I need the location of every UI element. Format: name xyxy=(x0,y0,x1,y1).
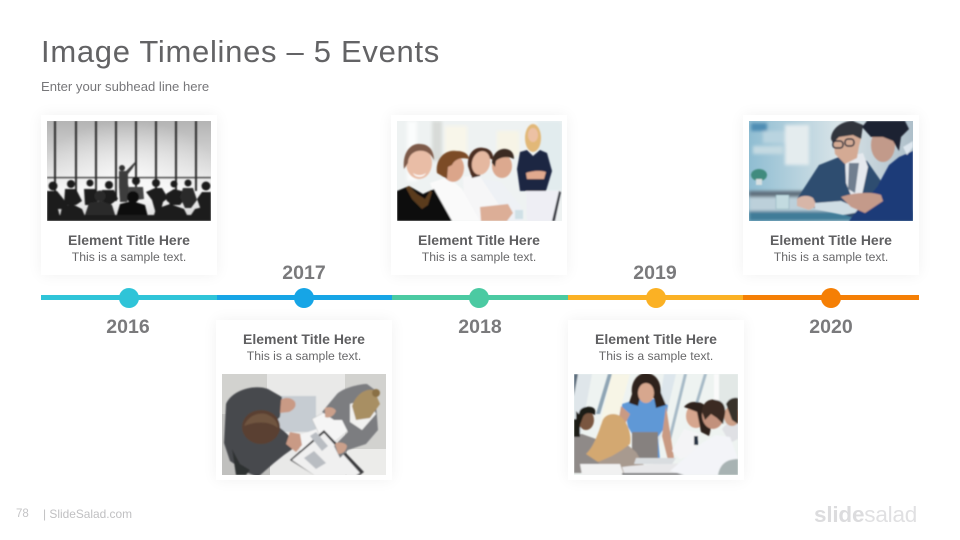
element title: Element Title Here xyxy=(68,232,190,248)
card: 2017 event xyxy=(216,320,392,480)
standing woman xyxy=(622,399,668,459)
marker: 2017 xyxy=(294,288,314,308)
presenter xyxy=(119,162,136,202)
standing woman xyxy=(525,124,541,152)
element title: Element Title Here xyxy=(595,331,717,347)
left man xyxy=(797,155,887,219)
element title: Element Title Here xyxy=(418,232,540,248)
photo: two businessmen reviewing a tablet xyxy=(749,121,913,221)
timeline segment: 2019 xyxy=(568,295,743,300)
left man xyxy=(574,434,602,473)
photo: two people at a desk from above xyxy=(222,374,386,475)
right group xyxy=(672,429,700,459)
year label: 2020: 2020 xyxy=(809,316,853,338)
photo: woman presenting to a meeting xyxy=(574,374,738,475)
photo: smiling team at a table xyxy=(397,121,562,221)
caption xyxy=(595,331,717,363)
card: 2020 event xyxy=(743,115,919,275)
marker: 2016 xyxy=(119,288,139,308)
year label: 2018: 2018 xyxy=(458,316,502,338)
timeline segment: 2017 xyxy=(217,295,392,300)
photo: silhouettes of an audience and presenter xyxy=(47,121,211,221)
caption xyxy=(770,232,892,264)
card: 2016 event xyxy=(41,115,217,275)
man 4 xyxy=(477,178,523,221)
front row xyxy=(67,194,77,204)
marker: 2020 xyxy=(821,288,841,308)
tablet xyxy=(815,201,865,215)
logo wordmark: slidesalad xyxy=(814,502,917,527)
sample text: This is a sample text. xyxy=(774,250,888,264)
woman 3 xyxy=(463,175,503,221)
year label: 2019: 2019 xyxy=(633,262,677,284)
timeline segment: 2020 xyxy=(743,295,919,300)
element title: Element Title Here xyxy=(770,232,892,248)
man 2 xyxy=(430,177,480,221)
sample text: This is a sample text. xyxy=(72,250,186,264)
subhead: Enter your subhead line here xyxy=(41,79,209,94)
marker: 2019 xyxy=(646,288,666,308)
footer source: | SlideSalad.com xyxy=(43,507,132,521)
laptop xyxy=(526,191,561,221)
marker: 2018 xyxy=(469,288,489,308)
right man xyxy=(849,151,913,221)
timeline segment: 2016 xyxy=(41,295,217,300)
timeline segment: 2018 xyxy=(392,295,568,300)
year label: 2016: 2016 xyxy=(106,316,150,338)
element title: Element Title Here xyxy=(243,331,365,347)
card: 2019 event xyxy=(568,320,744,480)
caption xyxy=(418,232,540,264)
timeline xyxy=(41,288,919,308)
title: Image Timelines – 5 Events xyxy=(41,34,440,69)
sample text: This is a sample text. xyxy=(247,349,361,363)
table xyxy=(622,464,732,473)
year label: 2017: 2017 xyxy=(282,262,326,284)
sample text: This is a sample text. xyxy=(599,349,713,363)
caption xyxy=(68,232,190,264)
blonde woman xyxy=(596,442,650,474)
caption xyxy=(243,331,365,363)
woman 1 xyxy=(397,186,452,221)
card: 2018 event xyxy=(391,115,567,275)
page number: 78 xyxy=(16,508,29,520)
seated row xyxy=(48,182,58,190)
sample text: This is a sample text. xyxy=(422,250,536,264)
